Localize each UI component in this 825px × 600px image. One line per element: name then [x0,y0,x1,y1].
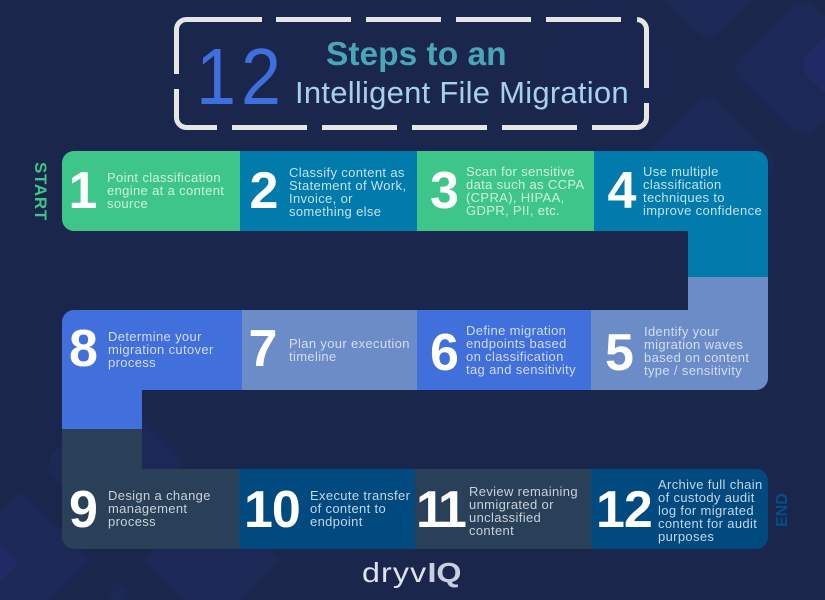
panel: step 5 [591,277,768,390]
text step 2: something else [289,204,381,219]
text step 8: migration cutover [108,342,214,357]
panel: step 12 [591,469,768,549]
title number 12: 12 [196,32,286,121]
START label: START [31,162,50,220]
number 3: 3 [430,162,459,220]
text step 9: Design a change [108,488,211,503]
number 2: 2 [250,162,278,220]
text step 2 [289,165,406,219]
END label: END [774,493,791,527]
text step 11: Review remaining [469,484,578,499]
text step 1: engine at a content [107,183,224,198]
text step 11: content [469,523,514,538]
text step 3: (CPRA), HIPAA, [466,190,565,205]
text step 5: migration waves [644,337,743,352]
title line: Steps to an: Steps to an [326,36,507,73]
text step 9: management [108,501,187,516]
text step 4: classification [643,177,722,192]
panel: step 2 [240,151,417,231]
text step 3: Scan for sensitive [466,164,575,179]
panel: step 6 [417,310,591,390]
text step 9: process [108,514,156,529]
number 5: 5 [605,324,634,382]
number 8: 8 [69,320,98,378]
text step 5: based on content [644,350,749,365]
text step 6: tag and sensitivity [466,362,576,377]
text step 7 [289,336,410,364]
text step 1: source [107,196,148,211]
text step 8 [108,332,214,370]
panel: step 4 [594,151,768,277]
text step 12: log for migrated [658,503,754,518]
text step 7: timeline [289,349,337,364]
text step 2: Invoice, or [289,191,353,206]
panel: step 8 [62,310,242,429]
text step 12: of custody audit [658,490,755,505]
text step 9 [108,490,210,528]
text step 10: Execute transfer [310,488,410,503]
panel: step 9 [62,429,239,549]
number 6: 6 [430,324,459,382]
text step 7: Plan your execution [289,336,410,351]
text step 3 [466,164,584,218]
text step 4 [643,166,762,218]
panel: step 3 [417,151,594,231]
text step 11: unclassified [469,510,541,525]
text step 4: Use multiple [643,164,719,179]
text step 2: Classify content as [289,165,405,180]
panel: step 1 [62,151,240,231]
text step 4: improve confidence [643,203,762,218]
logo: dryvIQ: dryvIQ [362,557,461,588]
text step 10 [310,488,410,529]
text step 11: unmigrated or [469,497,554,512]
text step 12: purposes [658,529,714,544]
text step 5: type / sensitivity [644,363,742,378]
text step 1 [107,170,224,211]
number 11: 11 [416,481,463,539]
number 12: 12 [596,481,652,539]
number 7: 7 [248,320,277,378]
text step 6: on classification [466,349,564,364]
text step 2: Statement of Work, [289,178,406,193]
text step 6: Define migration [466,323,566,338]
number 1: 1 [68,162,97,220]
text step 3: data such as CCPA [466,177,584,192]
text step 6: endpoints based [466,336,567,351]
text step 5 [644,326,749,378]
title frame [174,17,649,130]
text step 1: Point classification [107,170,221,185]
text step 12: content for audit [658,516,757,531]
number 10: 10 [244,481,300,539]
text step 10: endpoint [310,514,363,529]
panel: step 10 [239,469,415,549]
text step 5: Identify your [644,324,719,339]
text step 3: GDPR, PII, etc. [466,203,560,218]
text step 12: Archive full chain [658,477,763,492]
text step 8: Determine your [108,329,202,344]
title line: Intelligent File Migration: Intelligent File Migration [295,75,629,110]
text step 4: techniques to [643,190,725,205]
panel: step 7 [242,310,417,390]
number 4: 4 [608,162,636,220]
text step 11 [469,484,578,538]
panel: step 11 [415,469,591,549]
text step 10: of content to [310,501,386,516]
text step 6 [466,323,576,377]
text step 8: process [108,355,156,370]
number 9: 9 [69,481,98,539]
text step 12 [658,477,763,544]
